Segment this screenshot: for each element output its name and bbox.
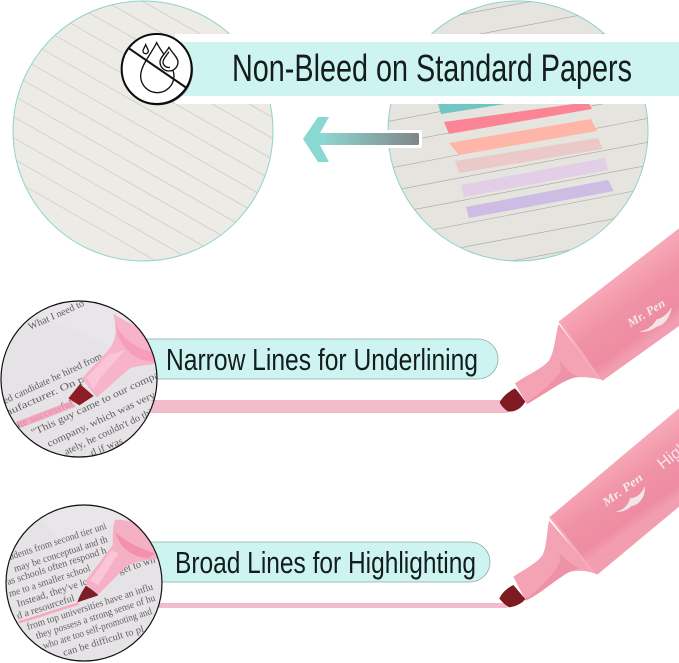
photo circle: broad tip on book page <box>6 505 162 661</box>
label pill: narrow lines: Narrow Lines for Underlining <box>166 342 478 377</box>
narrow pink stroke <box>150 400 508 413</box>
photo circle: narrow tip on book page: "This guy came to our compa <box>30 369 162 439</box>
photo circle: broad tip on book page: can be difficult to pl <box>62 624 145 659</box>
icon: no bleed drops <box>122 34 193 105</box>
photo circle: broad tip on book page: they possess a strong sense of hu <box>35 593 157 642</box>
photo circle: broad tip on book page: may be conceptual and th <box>13 534 109 575</box>
marker: bottom pink highlighter <box>499 407 679 607</box>
brand logo: Mr. Pen: Mr. Pen <box>624 296 668 330</box>
photo circle: narrow tip on book page: d if was <box>89 436 125 459</box>
photo circle: broad tip on book page: who are too self-promoting and <box>42 606 153 652</box>
photo circle: narrow tip on book page: ately, he couldn't do this <box>63 405 158 458</box>
brand logo: Mr. Pen: Mr. Pen <box>599 470 646 510</box>
marker: top pink highlighter <box>500 227 679 412</box>
photo circle: broad tip on book page: as schools often respond h <box>6 545 108 588</box>
panel: narrow line underlining <box>0 298 508 459</box>
photo circle: broad tip on book page: Instead, they've looked to get to wh <box>16 555 157 610</box>
panel: broad line highlighting <box>6 505 507 661</box>
photo circle: narrow tip on book page: nufacturer. On part, other comp <box>4 342 159 419</box>
photo circle: narrow tip on book page: ed candidate he hired from <box>2 351 104 407</box>
photo circle: broad tip on book page: d a resourceful <box>16 593 76 622</box>
panel: blank paper back side circle <box>12 0 274 262</box>
photo circle: narrow tip on book page: What I need to <box>27 298 86 333</box>
photo circle: broad tip on book page: from top universities have an influ <box>26 582 154 633</box>
banner: non-bleed heading <box>175 34 679 104</box>
photo circle: narrow tip on book page <box>0 298 162 459</box>
arrow: pointing to the back of the page <box>303 117 422 162</box>
photo circle: narrow tip on book page: company, which was very <box>46 390 157 450</box>
thin pink stroke <box>155 603 507 608</box>
photo circle: narrow tip on book page: ite successful <box>15 398 75 431</box>
photo circle: broad tip on book page: me to a smaller school <box>8 563 92 600</box>
photo circle: broad tip on book page: udents from second tier uni <box>8 521 108 563</box>
panel: highlighted paper circle <box>388 0 648 262</box>
label pill: broad lines: Broad Lines for Highlighting <box>175 545 476 580</box>
highlighter colour swatches <box>438 102 614 218</box>
label pill: broad lines <box>140 542 490 582</box>
